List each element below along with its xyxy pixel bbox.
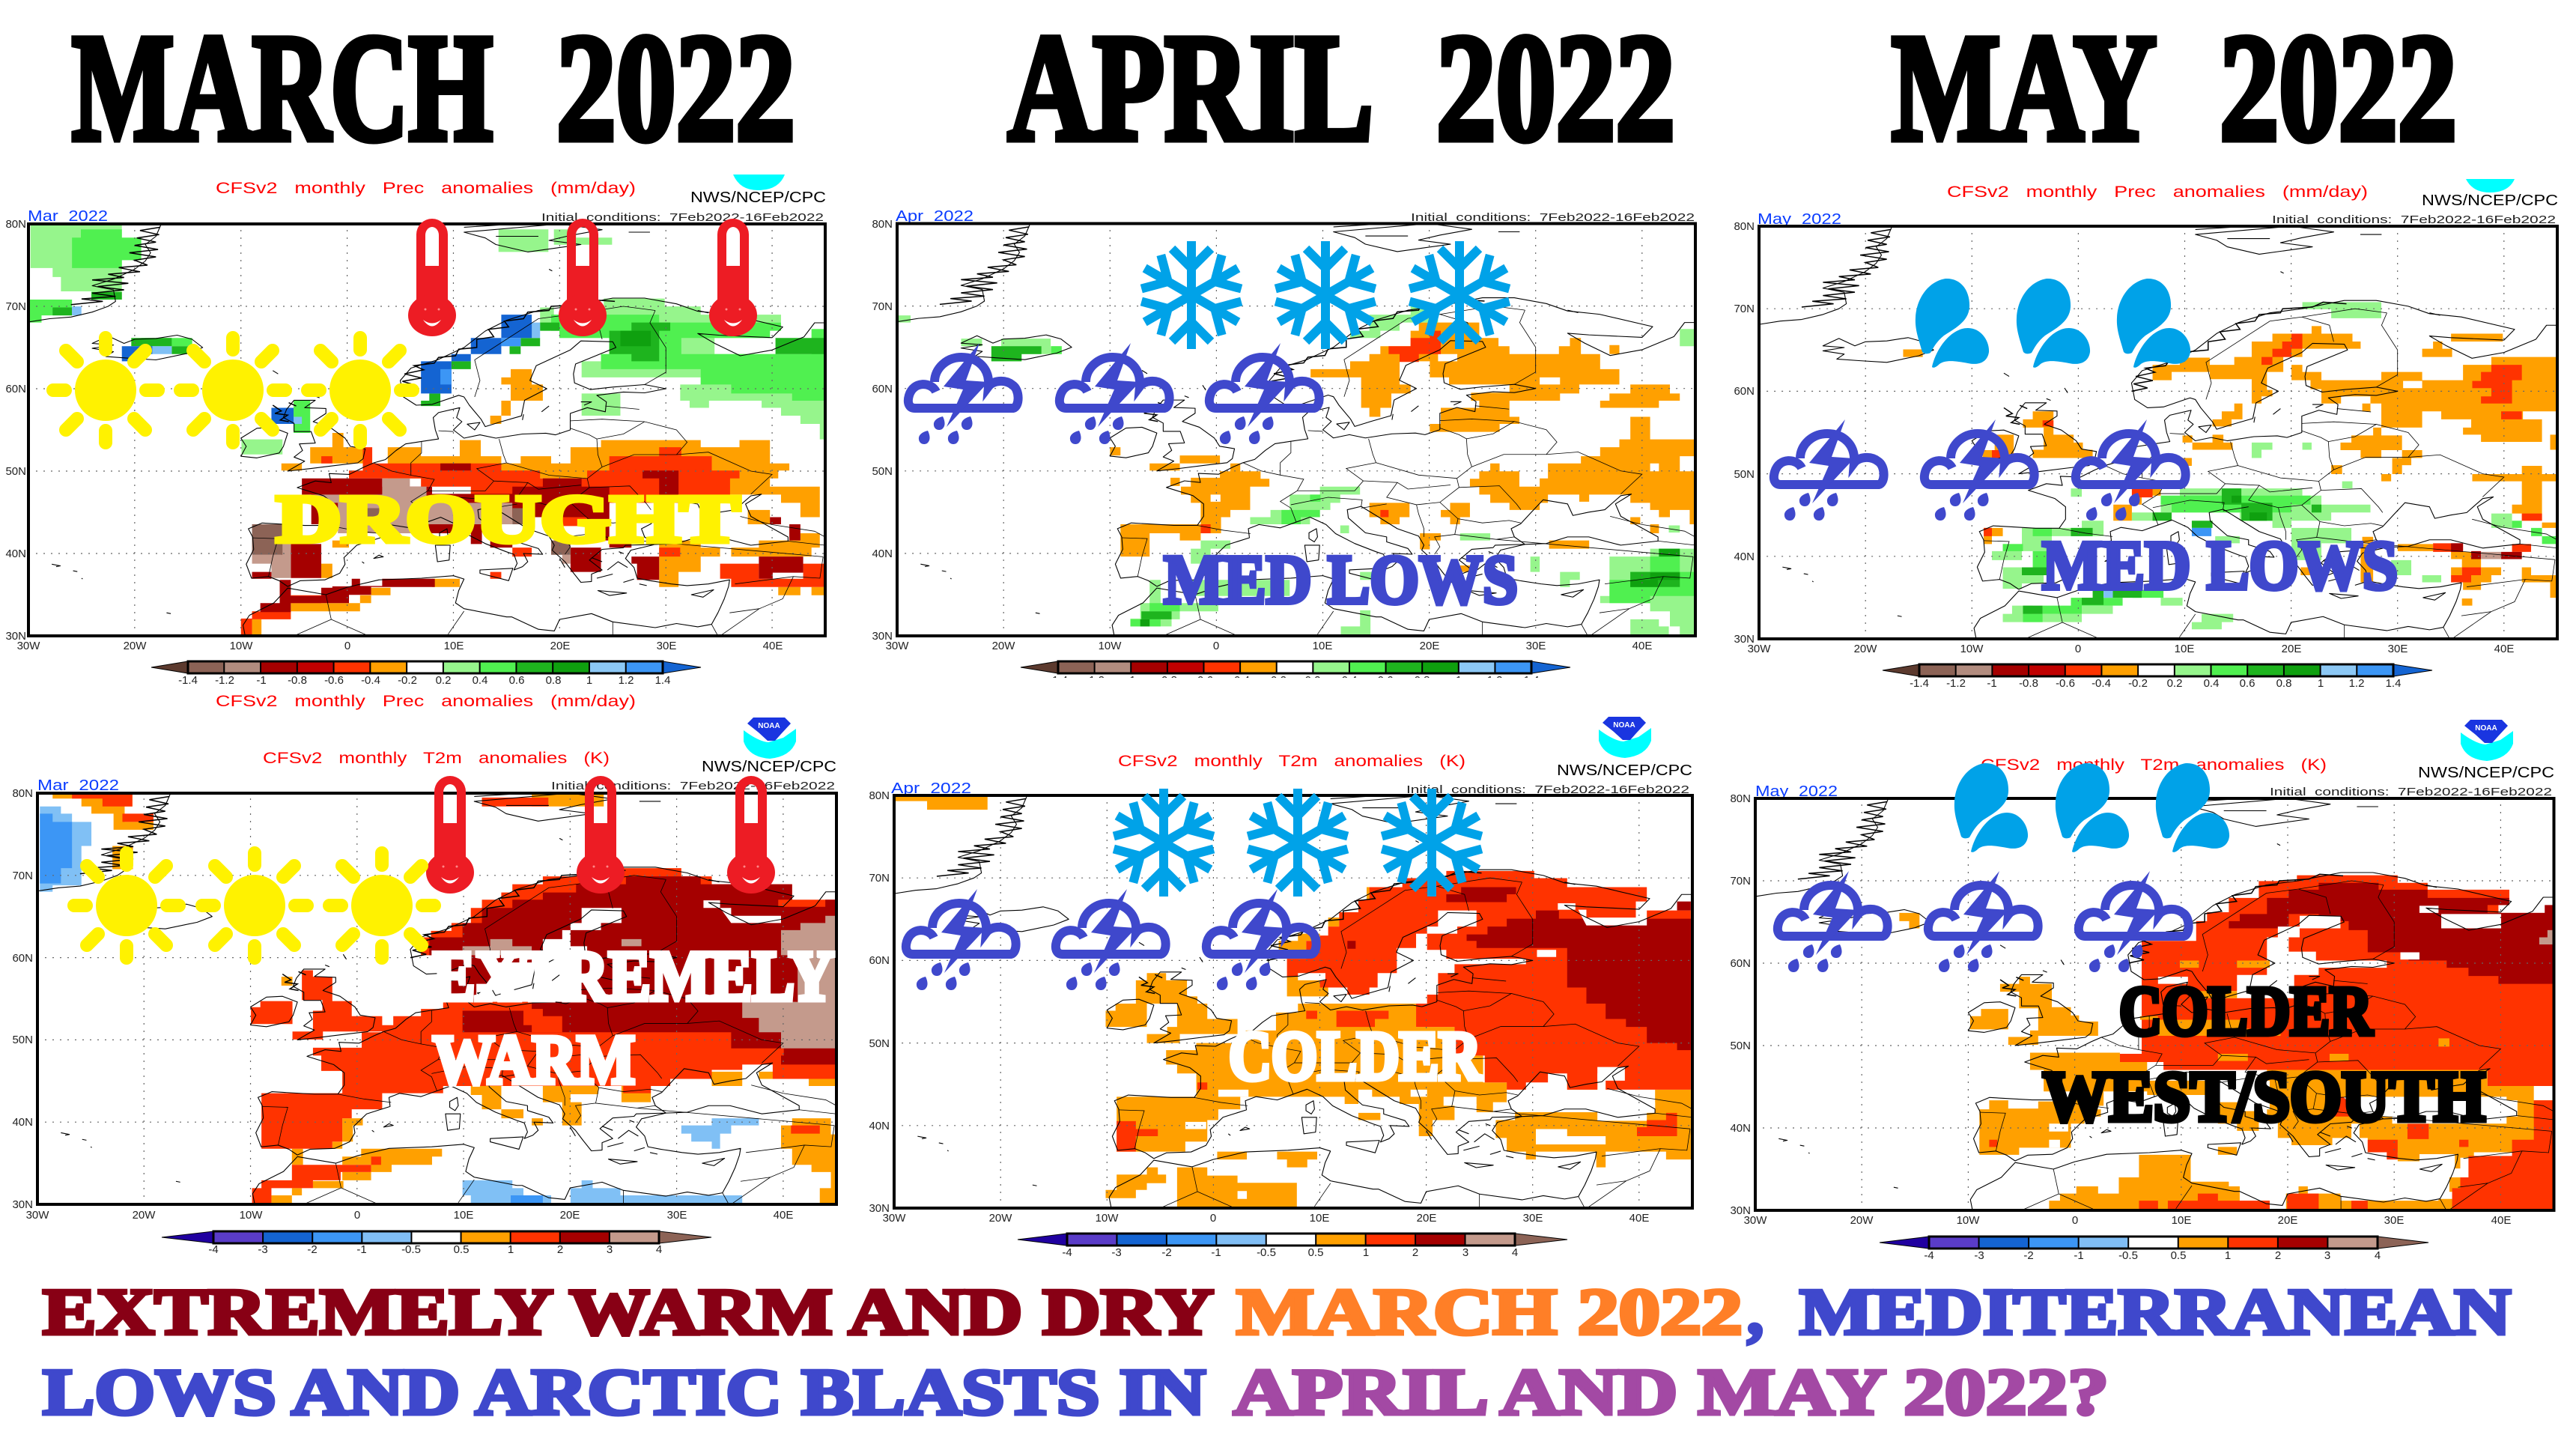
map heading: precipitation: CFSv2 monthly Prec anomalies (mm/day) — [216, 180, 636, 197]
colour scale: 3 — [607, 1243, 613, 1256]
agency label: NWS/NCEP/CPC — [702, 759, 836, 775]
axis labels: 40N — [1730, 1122, 1751, 1135]
anomaly map: May temperature — [1755, 798, 2554, 1212]
axis labels: 10E — [1310, 1212, 1329, 1225]
axis labels: 60N — [1734, 385, 1755, 398]
colour scale: 3 — [2324, 1249, 2330, 1262]
map heading: temperature: CFSv2 monthly T2m anomalies (K) — [1118, 753, 1465, 770]
NOAA logo — [744, 718, 796, 759]
colour scale: 1.4 — [655, 674, 670, 687]
coastlines and graticule — [894, 795, 1692, 1209]
axis labels: 80N — [1730, 792, 1751, 805]
colour scale: -0.4 — [361, 674, 380, 687]
colour scale: -4 — [1062, 1246, 1072, 1259]
axis labels: 40N — [12, 1116, 33, 1129]
axis labels: 40E — [1629, 1212, 1649, 1225]
axis labels: 10E — [2175, 643, 2194, 655]
axis labels: 50N — [1730, 1040, 1751, 1052]
title: March 2022: MARCH — [72, 3, 493, 173]
map heading: temperature: CFSv2 monthly T2m anomalies (K) — [1981, 756, 2327, 774]
anomaly map: March temperature — [37, 793, 836, 1205]
axis labels: 10W — [1099, 640, 1122, 652]
initial conditions note: Initial conditions: 7Feb2022-16Feb2022 — [1411, 211, 1695, 224]
headline line 1: EXTREMELY WARM AND DRY — [43, 1276, 1214, 1349]
axis labels: 30E — [2388, 643, 2408, 655]
axis labels — [869, 789, 1649, 1225]
label: colder: COLDER — [1229, 1018, 1482, 1095]
initial conditions note: Initial conditions: 7Feb2022-16Feb2022 — [2272, 213, 2556, 226]
title: April 2022: APRIL — [1008, 3, 1373, 173]
axis labels: 70N — [872, 300, 893, 313]
colour scale: -1.4 — [1910, 677, 1929, 690]
colour scale: 0.5 — [454, 1243, 469, 1256]
colour scale: 1 — [1456, 674, 1462, 687]
axis labels: 80N — [869, 789, 890, 802]
colour scale: 0.2 — [436, 674, 451, 687]
axis labels: 70N — [1730, 875, 1751, 888]
colour scale: -0.6 — [2056, 677, 2075, 690]
axis labels: 20W — [1850, 1214, 1874, 1227]
axis labels: 50N — [12, 1034, 33, 1046]
colour scale: 3 — [1462, 1246, 1468, 1259]
axis labels: 80N — [5, 218, 26, 231]
axis labels: 80N — [12, 787, 33, 800]
agency label: NWS/NCEP/CPC — [1557, 762, 1692, 779]
axis labels: 10W — [1096, 1212, 1119, 1225]
axis labels: 40E — [1632, 640, 1652, 652]
colour scale: 0.5 — [2171, 1249, 2186, 1262]
axis labels: 30E — [2384, 1214, 2404, 1227]
NOAA logo — [1599, 717, 1651, 758]
axis labels: 40E — [2494, 643, 2514, 655]
axis labels: 70N — [5, 300, 26, 313]
colour scale: 1.2 — [2349, 677, 2364, 690]
colour scale: 0.8 — [1415, 674, 1430, 687]
headline line 1: MARCH 2022 — [1236, 1276, 1743, 1349]
month label: May 2022 — [1758, 211, 1841, 228]
icons: storm clouds — [906, 889, 1316, 990]
axis labels: 60N — [869, 954, 890, 967]
label: extremely warm: EXTREMELY — [433, 936, 834, 1016]
title: May 2022: 2022 — [2220, 3, 2457, 173]
colour scale: -1 — [1987, 677, 1997, 690]
colour scale: 0.6 — [1378, 674, 1393, 687]
icons: storm clouds — [1774, 419, 2186, 521]
axis labels: 40N — [872, 547, 893, 560]
colour scale: -0.2 — [1267, 674, 1287, 687]
colour scale: 1 — [1363, 1246, 1369, 1259]
colour scale — [151, 661, 701, 687]
agency label with cropped logo: NWS/NCEP/CPC — [690, 189, 826, 206]
title: May 2022 — [1892, 3, 2457, 173]
icons: suns — [74, 853, 434, 958]
colour scale: -2 — [307, 1243, 318, 1256]
axis labels — [5, 218, 783, 652]
icons: snowflakes — [1108, 789, 1488, 897]
axis labels: 0 — [354, 1209, 360, 1222]
axis labels: 10E — [444, 640, 464, 652]
headline line 1: , — [1747, 1276, 1764, 1349]
colour scale: -4 — [1924, 1249, 1934, 1262]
colour scale: -0.2 — [2128, 677, 2148, 690]
colour scale: 0.8 — [2276, 677, 2291, 690]
colour scale — [1021, 661, 1570, 687]
axis labels: 40E — [763, 640, 783, 652]
axis labels: 20E — [560, 1209, 580, 1222]
title: May 2022: MAY — [1892, 3, 2157, 173]
axis labels: 10E — [2172, 1214, 2191, 1227]
axis labels: 10W — [240, 1209, 263, 1222]
axis labels: 40N — [1734, 550, 1755, 563]
axis labels: 40N — [5, 547, 26, 560]
axis labels: 30W — [17, 640, 40, 652]
axis labels: 30N — [5, 630, 26, 643]
axis labels: 10W — [1960, 643, 1984, 655]
anomaly map: March precipitation — [28, 224, 825, 637]
label: colder west/south — [2043, 973, 2485, 1136]
colour scale: -3 — [1974, 1249, 1984, 1262]
axis labels: 20E — [2278, 1214, 2297, 1227]
icons: thermometers — [408, 219, 757, 336]
agency label: NWS/NCEP/CPC — [2418, 765, 2554, 781]
colour scale: 0.2 — [1305, 674, 1320, 687]
axis labels: 80N — [1734, 220, 1755, 233]
axis labels: 0 — [1210, 1212, 1216, 1225]
headline line 1 — [43, 1276, 2511, 1349]
axis labels: 50N — [869, 1037, 890, 1050]
panel: March precipitation anomalies — [5, 175, 826, 710]
colour scale: 1 — [2225, 1249, 2231, 1262]
axis labels: 50N — [1734, 468, 1755, 481]
axis labels: 30W — [886, 640, 909, 652]
axis labels: 30W — [1748, 643, 1771, 655]
axis labels: 40E — [774, 1209, 793, 1222]
axis labels — [1734, 220, 2514, 655]
anomaly map: April precipitation — [897, 223, 1695, 637]
colour scale — [1018, 1234, 1567, 1259]
axis labels: 50N — [5, 465, 26, 478]
anomaly map: April temperature — [894, 795, 1692, 1209]
colour scale: 2 — [1412, 1246, 1418, 1259]
label: colder west/south: COLDER — [2119, 973, 2373, 1050]
month label: May 2022 — [1755, 783, 1838, 800]
colour scale: -1.4 — [1048, 674, 1068, 687]
axis labels: 20E — [1417, 1212, 1436, 1225]
icons: storm clouds — [1778, 871, 2189, 972]
colour scale: 1.2 — [1487, 674, 1502, 687]
axis labels — [872, 218, 1652, 652]
initial conditions note: Initial conditions: 7Feb2022-16Feb2022 — [551, 780, 835, 792]
axis labels: 0 — [1213, 640, 1219, 652]
axis labels: 40E — [2491, 1214, 2511, 1227]
axis labels: 10W — [1957, 1214, 1980, 1227]
colour scale: -3 — [258, 1243, 268, 1256]
axis labels: 20W — [124, 640, 147, 652]
colour scale: -1 — [356, 1243, 367, 1256]
colour scale: 1.4 — [2386, 677, 2401, 690]
label: extremely warm: WARM — [433, 1022, 635, 1099]
month label: Mar 2022 — [28, 208, 108, 225]
title: April 2022: 2022 — [1436, 3, 1675, 173]
icons: thermometers — [426, 776, 775, 894]
agency label with cropped logo — [690, 175, 826, 206]
axis labels: 20W — [133, 1209, 156, 1222]
colour scale: -0.5 — [401, 1243, 421, 1256]
axis labels: 0 — [344, 640, 350, 652]
colour scale: -4 — [208, 1243, 219, 1256]
panel: March temperature anomalies — [12, 718, 836, 1256]
month label: Apr 2022 — [896, 208, 973, 225]
axis labels: 70N — [869, 872, 890, 885]
axis labels: 30N — [1730, 1204, 1751, 1217]
label: Med lows: MED LOWS — [1164, 542, 1518, 619]
colour scale: 0.5 — [1308, 1246, 1323, 1259]
coastlines and graticule — [1759, 226, 2557, 640]
panel: May temperature anomalies — [1730, 720, 2554, 1262]
axis labels: 40N — [869, 1120, 890, 1132]
initial conditions note: Initial conditions: 7Feb2022-16Feb2022 — [2270, 786, 2552, 798]
colour scale: -0.4 — [2092, 677, 2111, 690]
colour scale: 0.2 — [2167, 677, 2182, 690]
panel: April precipitation anomalies — [872, 208, 1695, 687]
colour scale: -0.4 — [1230, 674, 1250, 687]
colour scale: 1 — [508, 1243, 514, 1256]
coastlines and graticule — [1755, 798, 2554, 1211]
map heading: temperature: CFSv2 monthly T2m anomalies (K) — [263, 750, 610, 767]
colour scale: -2 — [1161, 1246, 1172, 1259]
axis labels: 30E — [667, 1209, 687, 1222]
panel: May precipitation anomalies — [1734, 179, 2558, 690]
axis labels: 60N — [872, 383, 893, 395]
axis labels: 30N — [869, 1202, 890, 1215]
axis labels: 30N — [12, 1198, 33, 1211]
axis labels: 10E — [454, 1209, 473, 1222]
coastlines and graticule — [37, 793, 836, 1205]
anomaly map: May precipitation — [1759, 226, 2557, 640]
colour scale: -1 — [1126, 674, 1136, 687]
icons: suns — [53, 338, 413, 443]
colour scale — [1880, 1237, 2428, 1262]
icons: rain drops — [1954, 763, 2229, 852]
axis labels: 0 — [2072, 1214, 2078, 1227]
title: March 2022: 2022 — [556, 3, 795, 173]
axis labels: 20E — [2282, 643, 2301, 655]
axis labels: 30W — [26, 1209, 49, 1222]
colour scale: 1.4 — [1524, 674, 1539, 687]
initial conditions note: Initial conditions: 7Feb2022-16Feb2022 — [541, 211, 824, 224]
colour scale: -1.2 — [215, 674, 234, 687]
repeated map heading: CFSv2 monthly Prec anomalies (mm/day) — [216, 693, 636, 710]
icons: snowflakes — [1135, 241, 1516, 349]
axis labels: 10W — [230, 640, 253, 652]
colour scale: 0.6 — [509, 674, 524, 687]
headline line 1: MEDITERRANEAN — [1799, 1276, 2511, 1349]
colour scale: 0.6 — [2240, 677, 2255, 690]
axis labels — [1730, 792, 2511, 1227]
colour scale: -1 — [256, 674, 267, 687]
colour scale: 2 — [557, 1243, 563, 1256]
axis labels: 70N — [1734, 303, 1755, 315]
axis labels: 60N — [5, 383, 26, 395]
axis labels: 30E — [657, 640, 676, 652]
colour scale — [1883, 664, 2432, 690]
colour scale: 0.4 — [2204, 677, 2219, 690]
colour scale: -0.5 — [2118, 1249, 2138, 1262]
colour scale: -0.8 — [2019, 677, 2038, 690]
colour scale: 4 — [656, 1243, 662, 1256]
colour scale: -1.2 — [1946, 677, 1966, 690]
axis labels: 70N — [12, 870, 33, 882]
axis labels — [12, 787, 793, 1222]
headline line 2 — [43, 1356, 2109, 1429]
axis labels: 30W — [883, 1212, 906, 1225]
initial conditions note: Initial conditions: 7Feb2022-16Feb2022 — [1406, 783, 1689, 796]
axis labels: 30W — [1744, 1214, 1767, 1227]
axis labels: 80N — [872, 218, 893, 231]
axis labels: 30N — [872, 630, 893, 643]
colour scale: -1 — [1211, 1246, 1221, 1259]
colour scale: 1.2 — [619, 674, 634, 687]
headline line 2: LOWS AND ARCTIC BLASTS IN — [43, 1356, 1206, 1429]
coastlines and graticule — [897, 224, 1695, 637]
colour scale: 0.4 — [1342, 674, 1357, 687]
axis labels: 20E — [1420, 640, 1439, 652]
label: Med lows: MED LOWS — [2042, 527, 2398, 604]
axis labels: 60N — [12, 952, 33, 965]
colour scale: -0.5 — [1257, 1246, 1276, 1259]
axis labels: 30N — [1734, 633, 1755, 646]
axis labels: 0 — [2075, 643, 2081, 655]
agency label with cropped logo — [2422, 179, 2558, 209]
NOAA logo — [2461, 720, 2513, 761]
axis labels: 20W — [992, 640, 1015, 652]
month label: Apr 2022 — [891, 780, 971, 797]
colour scale: -3 — [1111, 1246, 1122, 1259]
colour scale: -0.6 — [1194, 674, 1213, 687]
colour scale: -0.8 — [288, 674, 307, 687]
colour scale: 0.4 — [473, 674, 487, 687]
label: extremely warm — [433, 936, 834, 1099]
colour scale: -2 — [2023, 1249, 2034, 1262]
panel: April temperature anomalies — [869, 717, 1692, 1259]
axis labels: 30E — [1523, 1212, 1543, 1225]
colour scale: 4 — [2375, 1249, 2381, 1262]
month label: Mar 2022 — [37, 777, 119, 794]
axis labels: 60N — [1730, 957, 1751, 970]
axis labels: 20E — [550, 640, 570, 652]
axis labels: 20W — [1854, 643, 1877, 655]
colour scale — [162, 1231, 711, 1256]
colour scale: -0.2 — [398, 674, 417, 687]
agency label with cropped logo: NWS/NCEP/CPC — [2422, 192, 2558, 209]
colour scale: 2 — [2275, 1249, 2281, 1262]
colour scale: -1.4 — [178, 674, 198, 687]
colour scale: 4 — [1512, 1246, 1518, 1259]
icons: storm clouds — [908, 343, 1319, 444]
icons: rain drops — [1916, 279, 2190, 368]
axis labels: 10E — [1313, 640, 1332, 652]
colour scale: 1 — [586, 674, 592, 687]
axis labels: 30E — [1526, 640, 1546, 652]
colour scale: -1.2 — [1085, 674, 1105, 687]
headline line 2: APRIL AND MAY 2022? — [1233, 1356, 2109, 1429]
axis labels: 20W — [989, 1212, 1012, 1225]
label: colder west/south: WEST/SOUTH — [2043, 1057, 2485, 1136]
map heading: precipitation: CFSv2 monthly Prec anomalies (mm/day) — [1947, 183, 2368, 201]
label: drought: DROUGHT — [276, 482, 740, 556]
colour scale: -0.8 — [1158, 674, 1177, 687]
colour scale: -1 — [2074, 1249, 2084, 1262]
colour scale: 0.8 — [546, 674, 561, 687]
colour scale: -0.6 — [324, 674, 344, 687]
coastlines and graticule — [28, 224, 825, 637]
axis labels: 50N — [872, 465, 893, 478]
colour scale: 1 — [2318, 677, 2324, 690]
